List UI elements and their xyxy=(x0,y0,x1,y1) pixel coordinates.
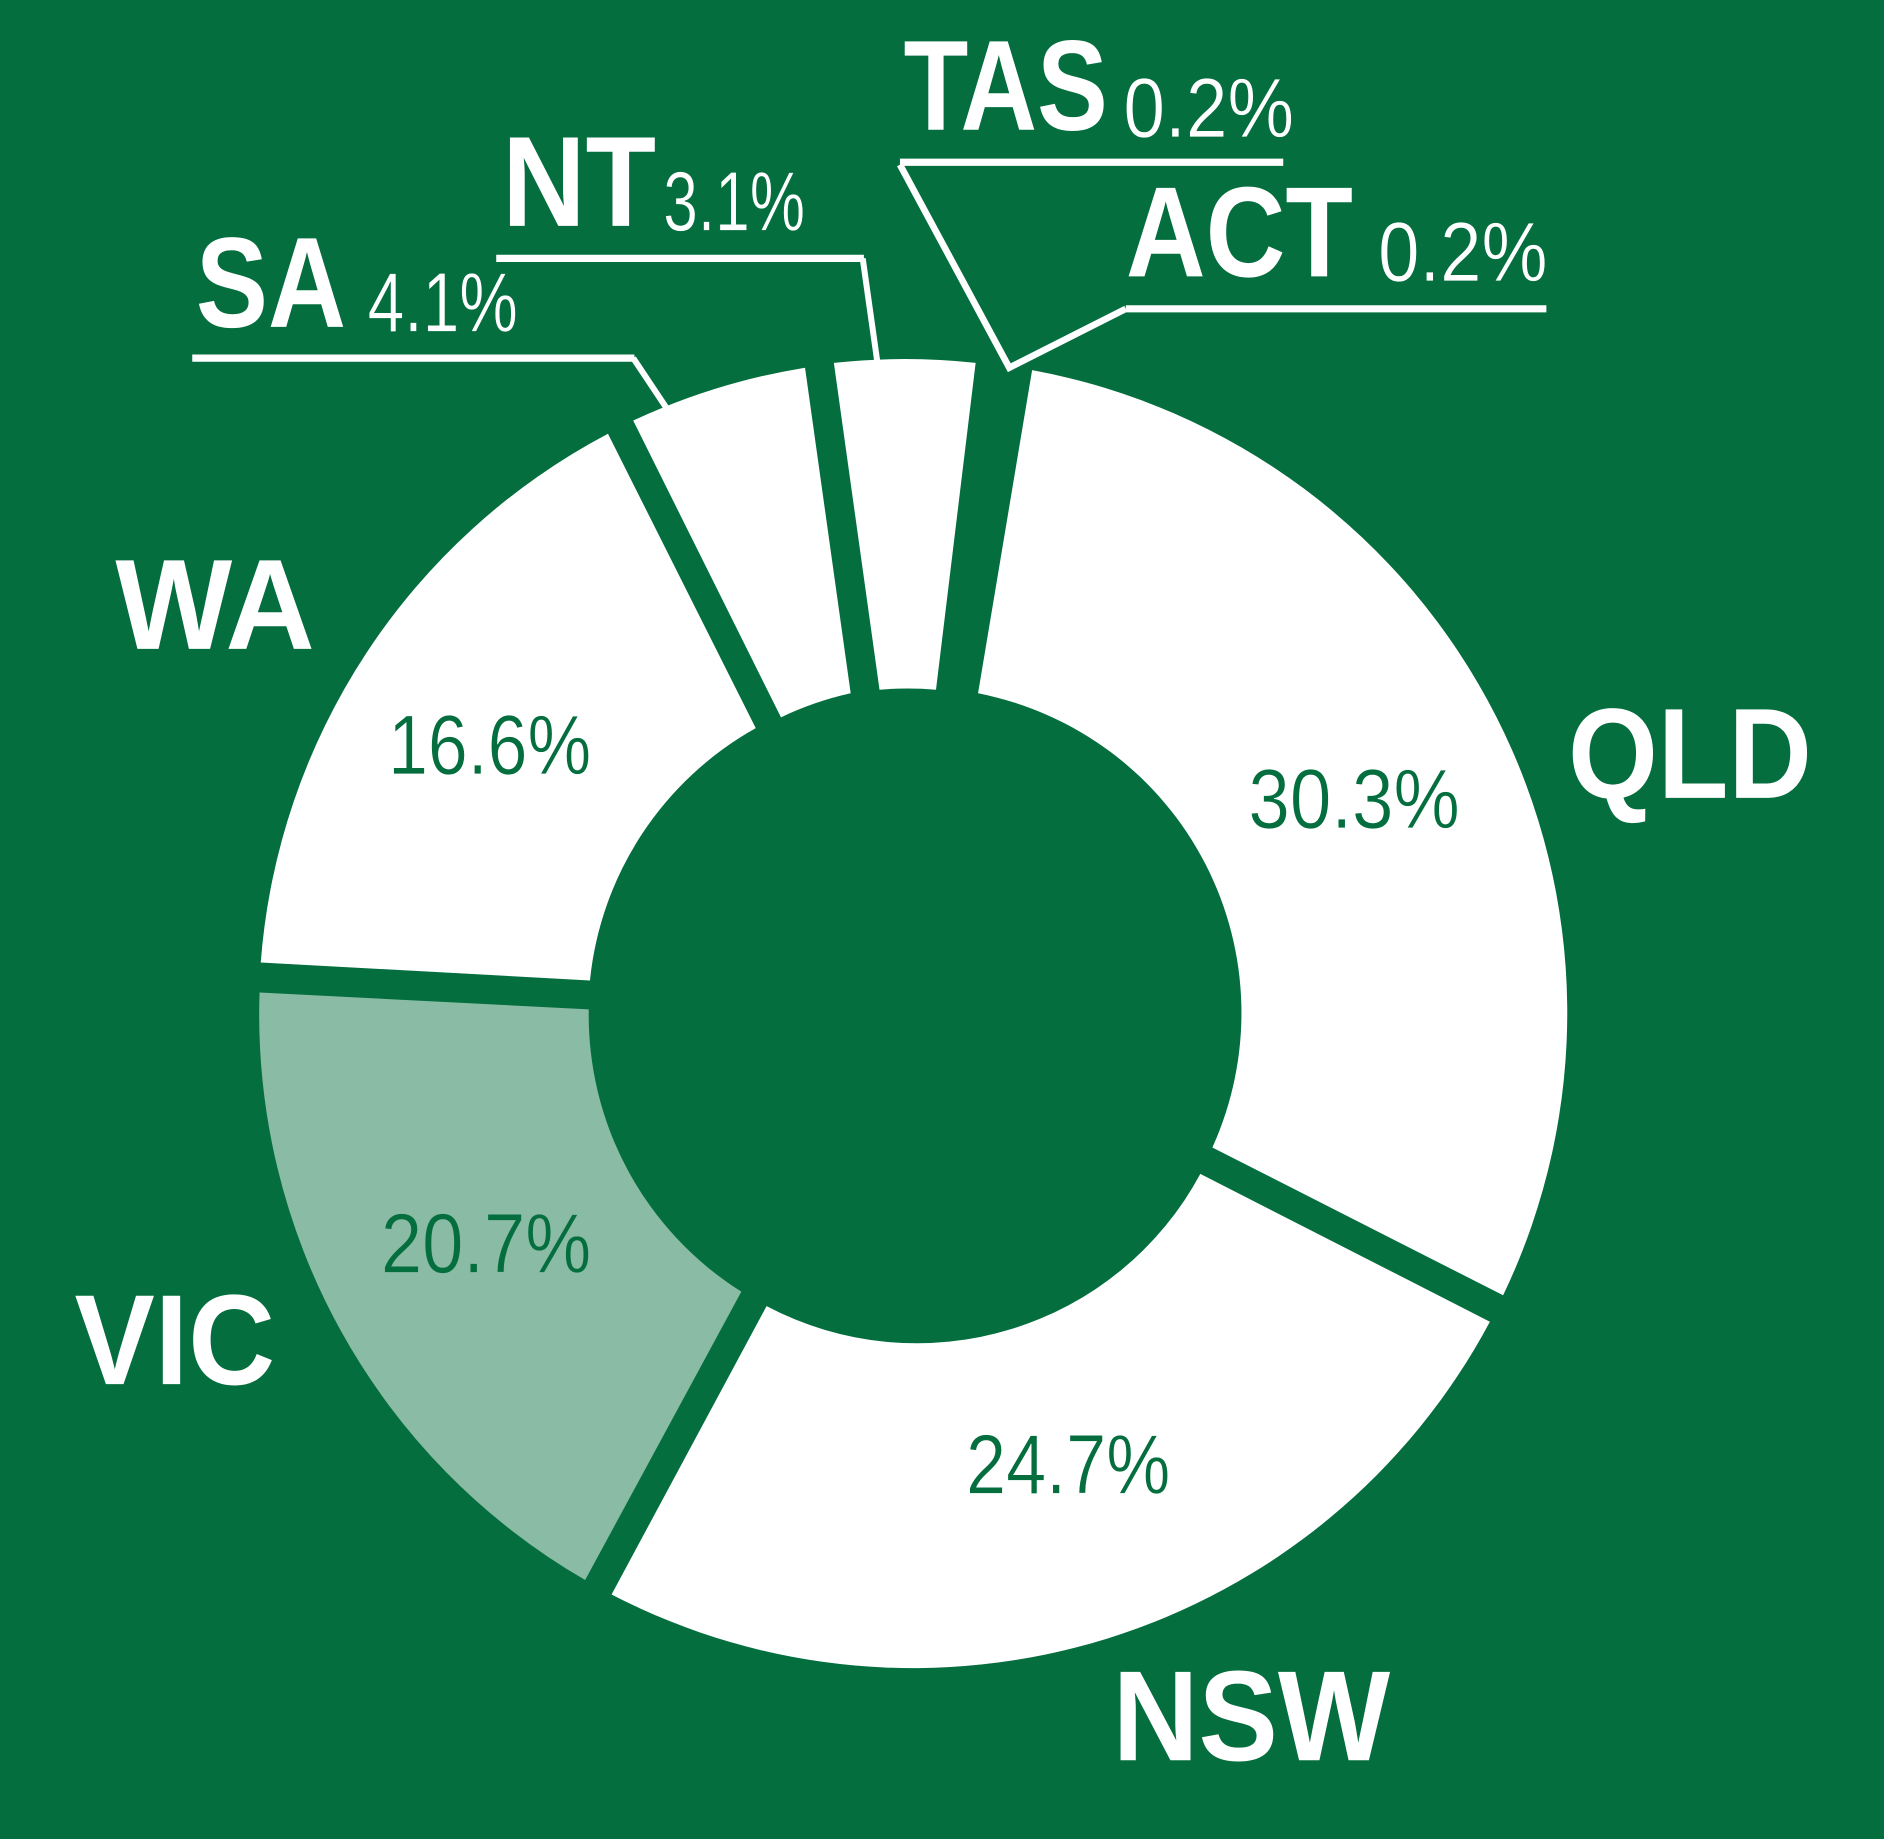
label: ACT: ACT xyxy=(1126,161,1353,304)
segment: WA xyxy=(261,434,756,980)
label: SA: SA xyxy=(196,212,346,355)
label: TAS: TAS xyxy=(904,15,1108,158)
value: WA: 16.6% xyxy=(388,698,591,792)
segment: QLD xyxy=(978,370,1567,1295)
segment: NT xyxy=(834,359,976,690)
leader line: TAS and ACT xyxy=(900,162,1546,368)
label: NSW: NSW xyxy=(1113,1645,1391,1788)
value: TAS: 0.2% xyxy=(1123,61,1294,155)
value: NT: 3.1% xyxy=(663,155,805,249)
label: QLD: QLD xyxy=(1568,683,1812,826)
label: NT: NT xyxy=(502,111,656,254)
label: WA: WA xyxy=(115,534,315,677)
label: VIC: VIC xyxy=(74,1269,275,1412)
donut chart xyxy=(259,359,1567,1668)
segment: SA xyxy=(633,368,851,717)
value: VIC: 20.7% xyxy=(381,1196,591,1290)
value: SA: 4.1% xyxy=(368,256,518,350)
segment: VIC xyxy=(259,992,741,1580)
leader line: NT xyxy=(496,258,877,360)
value: NSW: 24.7% xyxy=(966,1418,1170,1512)
leader line: SA xyxy=(192,358,667,409)
value: ACT: 0.2% xyxy=(1378,205,1548,299)
segment: NSW xyxy=(612,1174,1490,1668)
value: QLD: 30.3% xyxy=(1248,752,1460,846)
